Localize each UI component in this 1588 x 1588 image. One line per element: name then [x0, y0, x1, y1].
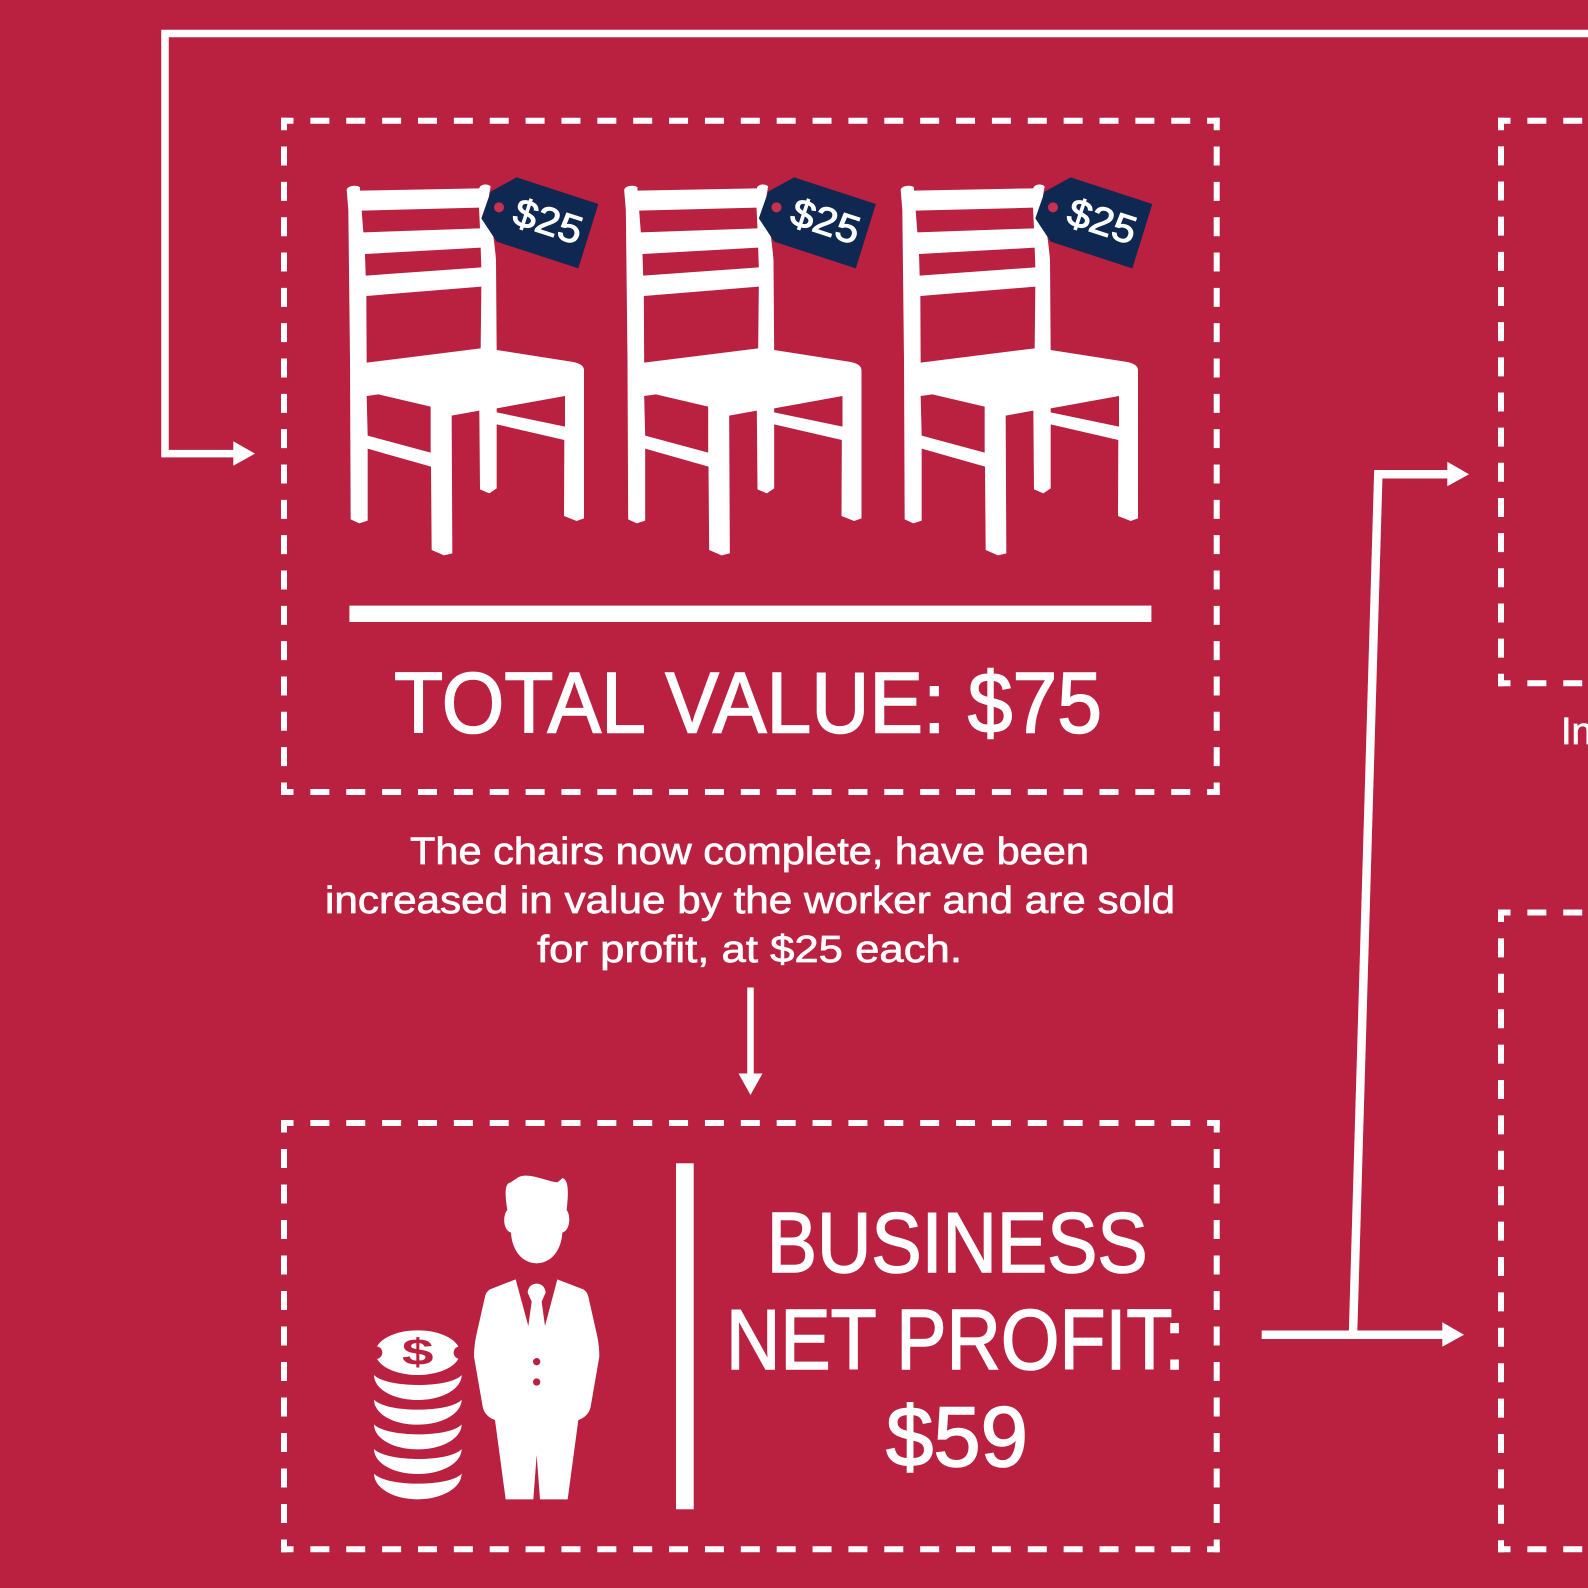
- arrow: description to net profit: [738, 988, 762, 1095]
- vertical divider: [676, 1163, 694, 1509]
- panel: total value: [281, 118, 1220, 795]
- icon: chair with $25 tag: $25: [1062, 190, 1142, 253]
- heading: business net profit: $59: [886, 1390, 1028, 1485]
- sum bar: [349, 606, 1151, 622]
- text block: chairs description: increased in value by the worker and are sold: [325, 880, 1175, 922]
- icon: businessman: [474, 1176, 599, 1499]
- icon: chair with $25 tag: $25: [785, 190, 866, 253]
- heading: business net profit: NET PROFIT:: [726, 1293, 1185, 1388]
- icon: chair with $25 tag: [347, 177, 598, 555]
- heading: business net profit: BUSINESS: [767, 1196, 1148, 1291]
- heading: business net profit: [726, 1196, 1185, 1485]
- icon: chair with $25 tag: [624, 177, 876, 555]
- text block: chairs description: for profit, at $25 each.: [537, 929, 962, 971]
- icon: chair with $25 tag: [901, 177, 1152, 555]
- panel: upper right (partly cropped): [1498, 118, 1588, 686]
- panel: business net profit: [281, 1120, 1220, 1552]
- icon: stack of coins: [370, 1330, 466, 1499]
- heading: total value: TOTAL VALUE: $75: [394, 656, 1102, 752]
- arrow: top feedback line into value panel: [165, 34, 1588, 466]
- arrow: net profit branching to right panels: [1262, 462, 1469, 1347]
- text block: chairs description: [325, 831, 1175, 971]
- icon: chair with $25 tag: $25: [508, 190, 588, 253]
- icon: stack of coins: $: [402, 1332, 433, 1373]
- panel: lower right (partly cropped): [1498, 910, 1588, 1552]
- text block: chairs description: The chairs now complete, have been: [410, 831, 1089, 873]
